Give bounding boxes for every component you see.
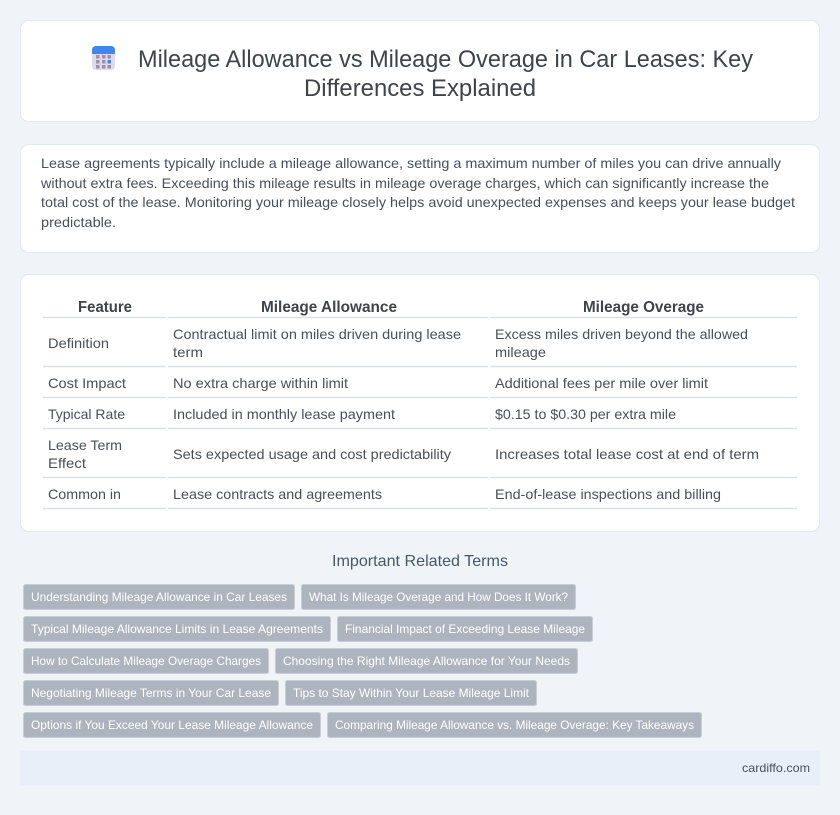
- table row: definition: term: [173, 344, 203, 360]
- table row: common in: End-of-lease inspections and billing: [495, 486, 721, 502]
- table row: common in: Common in: [48, 486, 121, 502]
- table row: cost impact: Additional fees per mile over limit: [495, 375, 708, 391]
- tag: Choosing the Right Mileage Allowance for Your Needs: [283, 654, 570, 668]
- tag: [286, 680, 536, 706]
- tag: [338, 616, 592, 642]
- panel: introduction text: total cost of the lease. Monitoring your mileage closely helps avoid unexpected expenses and keeps your lease budget: [41, 194, 795, 210]
- table row: cost impact: [48, 375, 708, 391]
- table row: lease term effect: Effect: [48, 455, 86, 471]
- tag: Comparing Mileage Allowance vs. Mileage Overage: Key Takeaways: [335, 718, 694, 732]
- tag: [302, 584, 576, 610]
- table row: common in: [48, 486, 721, 502]
- table row: cost impact: Cost Impact: [48, 375, 126, 391]
- tag: [24, 584, 294, 610]
- table row: cost impact: No extra charge within limit: [173, 375, 348, 391]
- table row: definition: mileage: [495, 344, 546, 360]
- tag: Typical Mileage Allowance Limits in Lease Agreements: [31, 622, 323, 636]
- tag: [24, 680, 278, 706]
- tag: [24, 648, 268, 674]
- panel: header: [20, 20, 820, 122]
- heading: important related terms: Important Related Terms: [332, 553, 508, 570]
- title: Mileage Allowance vs Mileage Overage in Car Leases: Key: [138, 46, 753, 73]
- tag: Tips to Stay Within Your Lease Mileage Limit: [293, 686, 530, 700]
- table row: typical rate: $0.15 to $0.30 per extra mile: [495, 406, 676, 422]
- table row: common in: Lease contracts and agreements: [173, 486, 382, 502]
- tag: [24, 712, 320, 738]
- table header row: Mileage Overage: [583, 299, 704, 316]
- icon: calendar: [92, 46, 115, 70]
- footer: [20, 751, 820, 785]
- table row: definition: Excess miles driven beyond the allowed: [495, 326, 748, 342]
- panel: introduction text: Lease agreements typically include a mileage allowance, setting a maximum number of miles you can drive annually: [41, 155, 781, 171]
- table row: lease term effect: Sets expected usage and cost predictability: [173, 446, 451, 462]
- tag: Financial Impact of Exceeding Lease Mileage: [345, 622, 585, 636]
- title: Differences Explained: [304, 75, 536, 102]
- table row: lease term effect: Lease Term: [48, 437, 122, 453]
- table row: definition: Definition: [48, 335, 109, 351]
- table row: typical rate: Included in monthly lease payment: [173, 406, 395, 422]
- table row: typical rate: [48, 406, 676, 422]
- table header row: [78, 299, 704, 316]
- title: [138, 46, 753, 102]
- tag: Options if You Exceed Your Lease Mileage Allowance: [31, 718, 313, 732]
- footer: cardiffo.com: [742, 761, 810, 775]
- panel: introduction text: [20, 144, 820, 252]
- tag: Negotiating Mileage Terms in Your Car Lease: [31, 686, 271, 700]
- tag: [328, 712, 702, 738]
- tag: [276, 648, 578, 674]
- table row: definition: [48, 326, 748, 360]
- table header row: Feature: [78, 299, 132, 316]
- tag: What Is Mileage Overage and How Does It Work?: [309, 590, 568, 604]
- table header row: Mileage Allowance: [261, 299, 397, 316]
- table row: definition: Contractual limit on miles driven during lease: [173, 326, 461, 342]
- tag: How to Calculate Mileage Overage Charges: [31, 654, 261, 668]
- panel: comparison table: [20, 274, 820, 532]
- panel: introduction text: predictable.: [41, 214, 116, 230]
- table row: lease term effect: [48, 437, 759, 471]
- tag: Understanding Mileage Allowance in Car Leases: [31, 590, 287, 604]
- panel: introduction text: without extra fees. Exceeding this mileage results in mileage overage charges, which can significantly increase the: [40, 175, 769, 191]
- table row: typical rate: Typical Rate: [48, 406, 125, 422]
- table row: lease term effect: Increases total lease cost at end of term: [495, 446, 759, 462]
- related terms tags: [24, 584, 702, 738]
- tag: [24, 616, 330, 642]
